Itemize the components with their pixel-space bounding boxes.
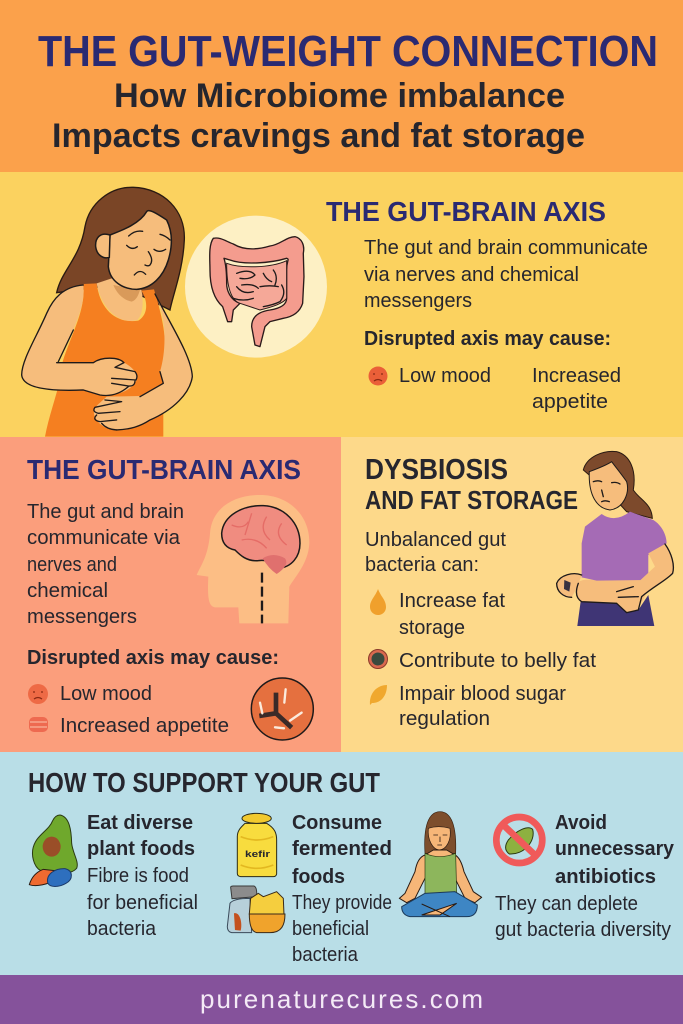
list item: increase fat storage: Increase fat	[399, 589, 505, 612]
text: avoid unnecessary antibiotics: gut bacteria diversity	[495, 918, 672, 941]
illustration: woman holding stomach	[22, 187, 192, 437]
text block: The gut and brain	[27, 500, 184, 523]
text: eat diverse plant foods: Fibre is food	[87, 864, 189, 887]
panel: gut-brain axis left	[0, 437, 341, 752]
icon: no antibiotics sign	[496, 817, 542, 863]
icon: kefir jar	[237, 813, 277, 877]
text: consume fermented foods	[292, 811, 392, 966]
text block: bacteria can:	[365, 553, 479, 576]
text block	[364, 236, 648, 312]
text: consume fermented foods: foods	[292, 865, 345, 888]
text block	[27, 500, 184, 628]
list item: low mood: Low mood	[60, 682, 152, 705]
list item: low mood: Low mood	[399, 364, 491, 387]
heading: THE GUT-BRAIN AXIS	[27, 454, 301, 485]
text block: communicate via	[27, 526, 181, 549]
text block	[365, 528, 506, 576]
heading: AND FAT STORAGE	[365, 485, 578, 515]
text: consume fermented foods: bacteria	[292, 943, 359, 966]
text block: messengers	[27, 605, 137, 628]
text block: messengers	[364, 289, 472, 312]
icon: avocado and berries	[29, 815, 77, 886]
panel: gut-brain axis top	[0, 172, 683, 437]
text: eat diverse plant foods: Eat diverse	[87, 811, 193, 834]
text block: via nerves and chemical	[364, 263, 579, 286]
panel: how to support your gut	[0, 752, 683, 975]
list item: blood sugar: regulation	[399, 707, 490, 730]
list item: increased appetite: appetite	[532, 390, 608, 413]
list item: increase fat storage: storage	[399, 616, 465, 639]
text block: chemical	[27, 579, 108, 602]
text: consume fermented foods: Consume	[292, 811, 382, 834]
icon: fermented foods jars	[227, 886, 285, 933]
panel: footer	[0, 975, 683, 1024]
text: consume fermented foods: fermented	[292, 837, 392, 860]
text: avoid unnecessary antibiotics: Avoid	[555, 811, 607, 834]
subheading: Disrupted axis may cause:	[364, 328, 611, 350]
icon: head with brain	[197, 495, 309, 623]
subtitle: Impacts cravings and fat storage	[52, 117, 585, 155]
text: eat diverse plant foods: bacteria	[87, 917, 157, 940]
icon: kefir jar: kefir	[245, 849, 271, 859]
illustration: woman with belly fat	[557, 451, 673, 626]
subheading: Disrupted axis may cause:	[27, 647, 279, 669]
text: consume fermented foods: They provide	[292, 891, 392, 914]
list item: increased appetite: Increased	[532, 364, 621, 387]
text: avoid unnecessary antibiotics: unnecessary	[555, 837, 675, 860]
text: avoid unnecessary antibiotics: antibiotics	[555, 865, 656, 888]
subtitle: How Microbiome imbalance	[114, 77, 565, 115]
illustration: woman meditating	[399, 812, 482, 917]
text block: nerves and	[27, 553, 117, 576]
heading: HOW TO SUPPORT YOUR GUT	[28, 767, 380, 798]
text: eat diverse plant foods	[87, 811, 198, 940]
text: avoid unnecessary antibiotics: They can deplete	[495, 892, 638, 915]
list item: blood sugar: Impair blood sugar	[399, 682, 566, 705]
list item: blood sugar	[370, 682, 566, 730]
text: eat diverse plant foods: for beneficial	[87, 891, 198, 914]
text: eat diverse plant foods: plant foods	[87, 837, 195, 860]
icon: intestine in circle	[185, 216, 327, 358]
heading: DYSBIOSIS	[365, 454, 508, 486]
panel: header	[0, 0, 683, 172]
text block: The gut and brain communicate	[364, 236, 648, 259]
list item: increase fat storage	[370, 589, 505, 639]
footer url: purenaturecures.com	[200, 984, 483, 1014]
subtitle	[52, 77, 585, 155]
list item: increased appetite	[532, 364, 621, 413]
list item: increased appetite: Increased appetite	[60, 714, 229, 737]
list item: belly fat: Contribute to belly fat	[399, 649, 596, 672]
text block: Unbalanced gut	[365, 528, 506, 551]
panel: dysbiosis	[341, 437, 683, 752]
text: consume fermented foods: beneficial	[292, 917, 369, 940]
text: avoid unnecessary antibiotics	[495, 811, 675, 941]
heading	[365, 454, 578, 515]
icon: gut distress circle	[251, 678, 313, 740]
heading: THE GUT-BRAIN AXIS	[326, 196, 606, 227]
